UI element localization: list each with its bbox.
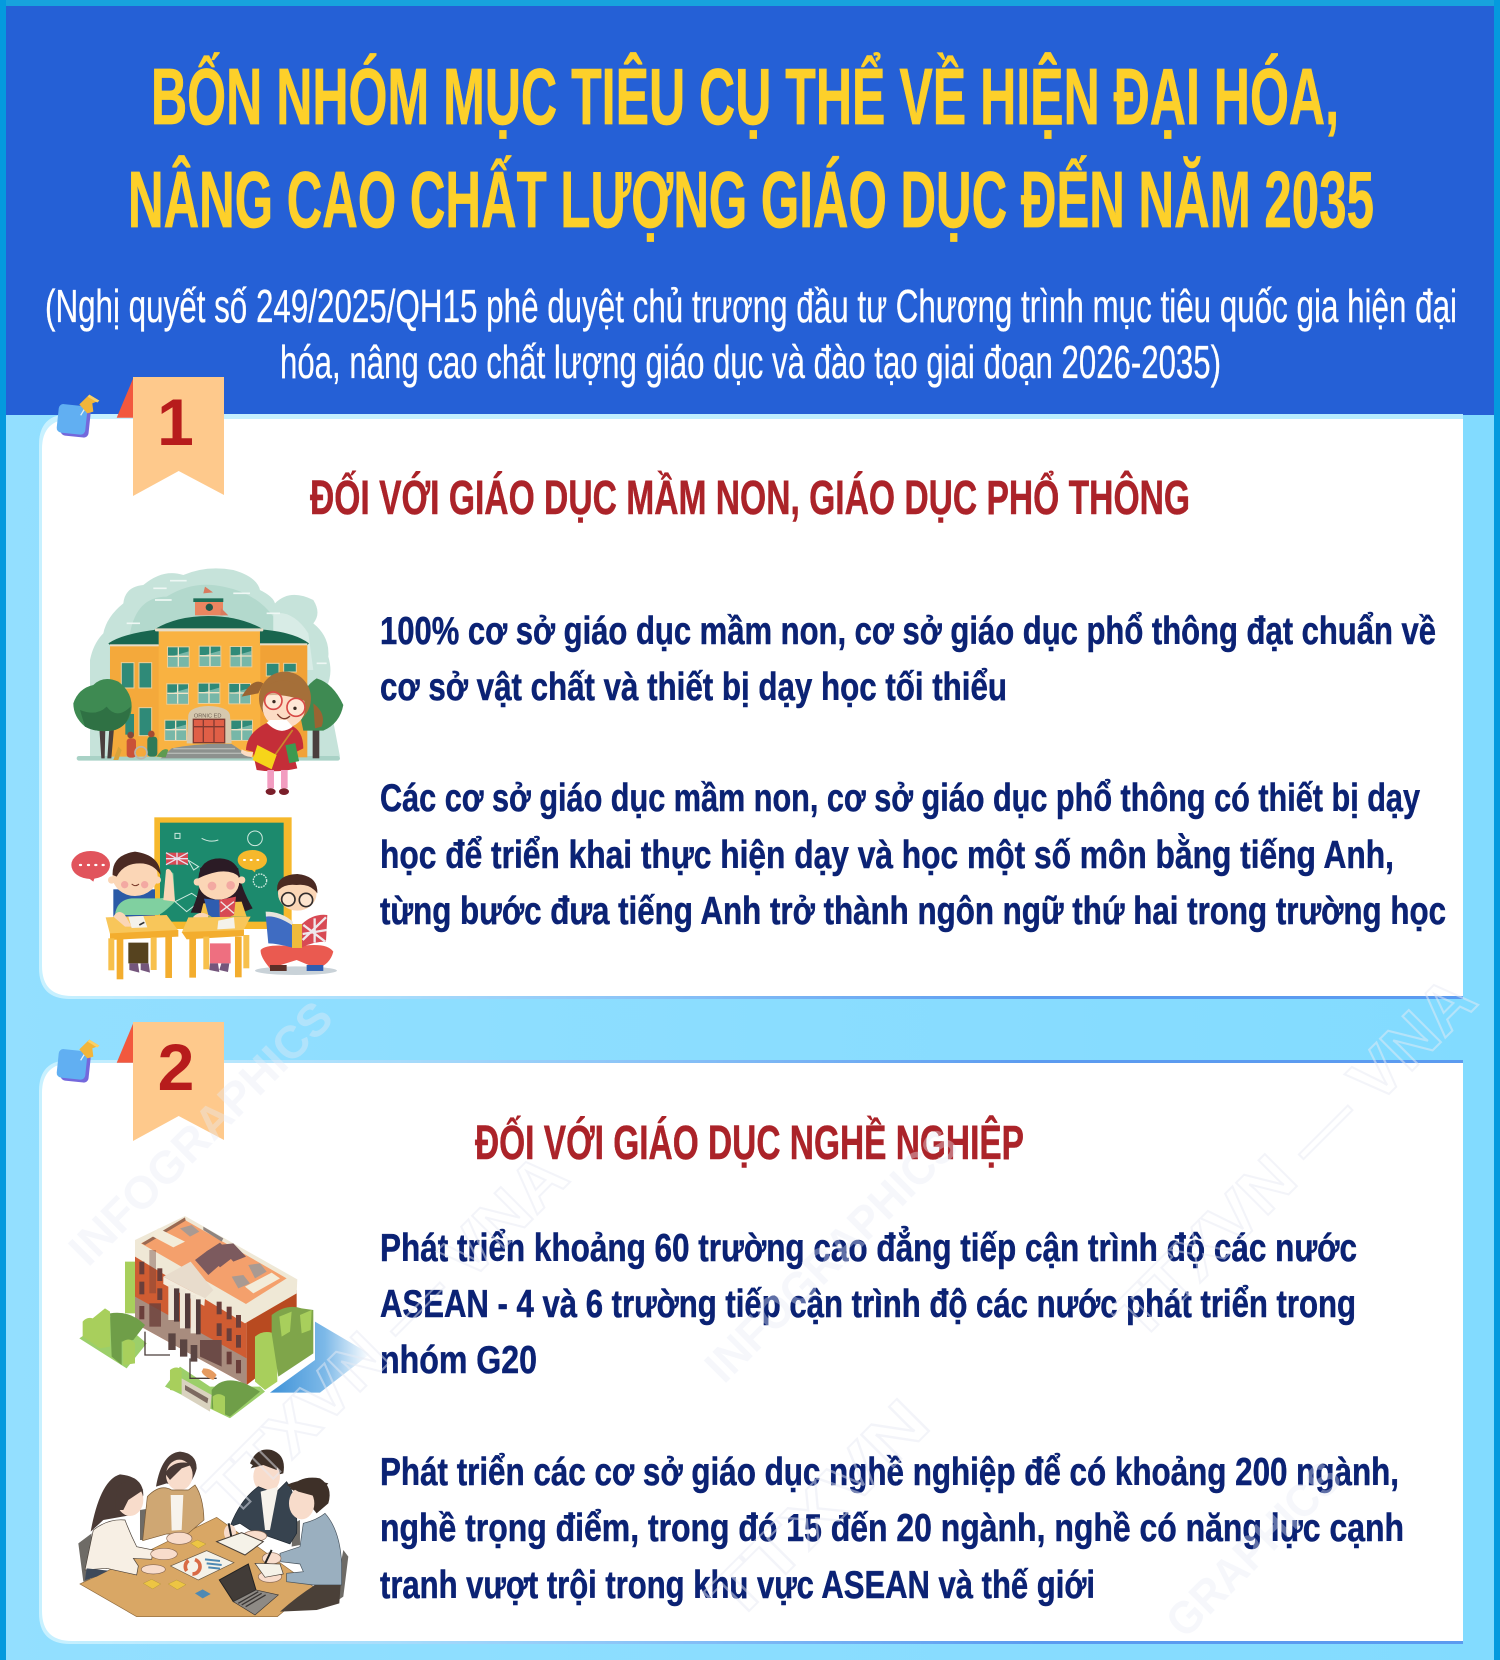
text block: section 1 paragraph 1 <box>380 610 1436 709</box>
person 4: man in blue shirt <box>258 1478 342 1612</box>
watermark: INFOGRAPHICS <box>58 991 343 1275</box>
portico <box>163 1262 222 1367</box>
speech bubbles <box>71 850 267 882</box>
report document <box>171 1551 234 1580</box>
person 2: woman in tan blazer <box>143 1452 204 1544</box>
laptop <box>219 1564 278 1615</box>
text block: section 2 paragraph 1 <box>380 1225 1357 1382</box>
shadow <box>270 1322 370 1393</box>
windows <box>139 1250 241 1373</box>
illustration: isometric college building <box>79 1216 370 1418</box>
ground <box>79 1315 265 1418</box>
boy reading book <box>255 874 337 975</box>
illustration: classroom children <box>71 817 337 979</box>
subtitle <box>45 280 1457 388</box>
watermark: TTXVN <box>693 1385 943 1635</box>
boy at desk <box>108 852 175 973</box>
table <box>80 1517 313 1617</box>
icon: sticky note with pin, section 1 <box>56 395 99 438</box>
chairs <box>78 1508 348 1603</box>
text block: section 1 paragraph 1: cơ sở vật chất và thiết bị dạy học tối thiểu <box>380 666 1007 709</box>
text block: section 2 paragraph 2 <box>380 1451 1404 1607</box>
notebook <box>217 1533 263 1555</box>
person 3: man in dark suit <box>224 1449 297 1544</box>
illustration: school with girl <box>73 568 343 795</box>
watermark: GRAPHICS <box>1155 1451 1351 1647</box>
watermark: INFOGRAPHICS <box>694 1118 968 1392</box>
small people <box>113 731 168 760</box>
title <box>128 52 1374 244</box>
illustration: team meeting around a table <box>78 1449 348 1617</box>
watermark: TTXVN — VNA <box>1098 961 1489 1353</box>
text block: section 2 paragraph 2: tranh vượt trội trong khu vực ASEAN và thế giới <box>380 1564 1095 1607</box>
walls <box>125 1216 297 1385</box>
badge: number 2 ribbon: 2 <box>158 1030 194 1104</box>
header band <box>0 0 1500 415</box>
person 1: woman in cream top <box>85 1474 177 1580</box>
text block: section 1 paragraph 2 <box>380 777 1446 933</box>
girl at desk <box>191 858 253 972</box>
badge: number 1 ribbon: 1 <box>157 385 194 459</box>
icon: sticky note with pin, section 2 <box>56 1040 99 1083</box>
watermark: TTXVN — VNA <box>190 1138 581 1530</box>
panel: card 2 <box>39 1060 1463 1644</box>
building <box>108 587 309 758</box>
heading: section 2: ĐỐI VỚI GIÁO DỤC NGHỀ NGHIỆP <box>475 1115 1024 1170</box>
right tree <box>298 678 343 758</box>
girl <box>241 672 323 795</box>
bushes <box>83 1307 313 1417</box>
building: ORNIC ED <box>194 713 221 719</box>
blackboard <box>154 817 292 929</box>
desk 1 <box>106 912 178 979</box>
badge: number 1 ribbon <box>117 377 224 496</box>
badge: number 2 ribbon <box>117 1022 224 1141</box>
left tree <box>73 679 132 758</box>
watermark <box>58 961 1489 1647</box>
lamps and walk <box>145 1332 217 1378</box>
desk 2 <box>182 917 251 978</box>
sticky notes <box>143 1540 206 1590</box>
text block: section 2 paragraph 1: nhóm G20 <box>380 1339 537 1382</box>
panel: card 1 <box>39 414 1463 999</box>
